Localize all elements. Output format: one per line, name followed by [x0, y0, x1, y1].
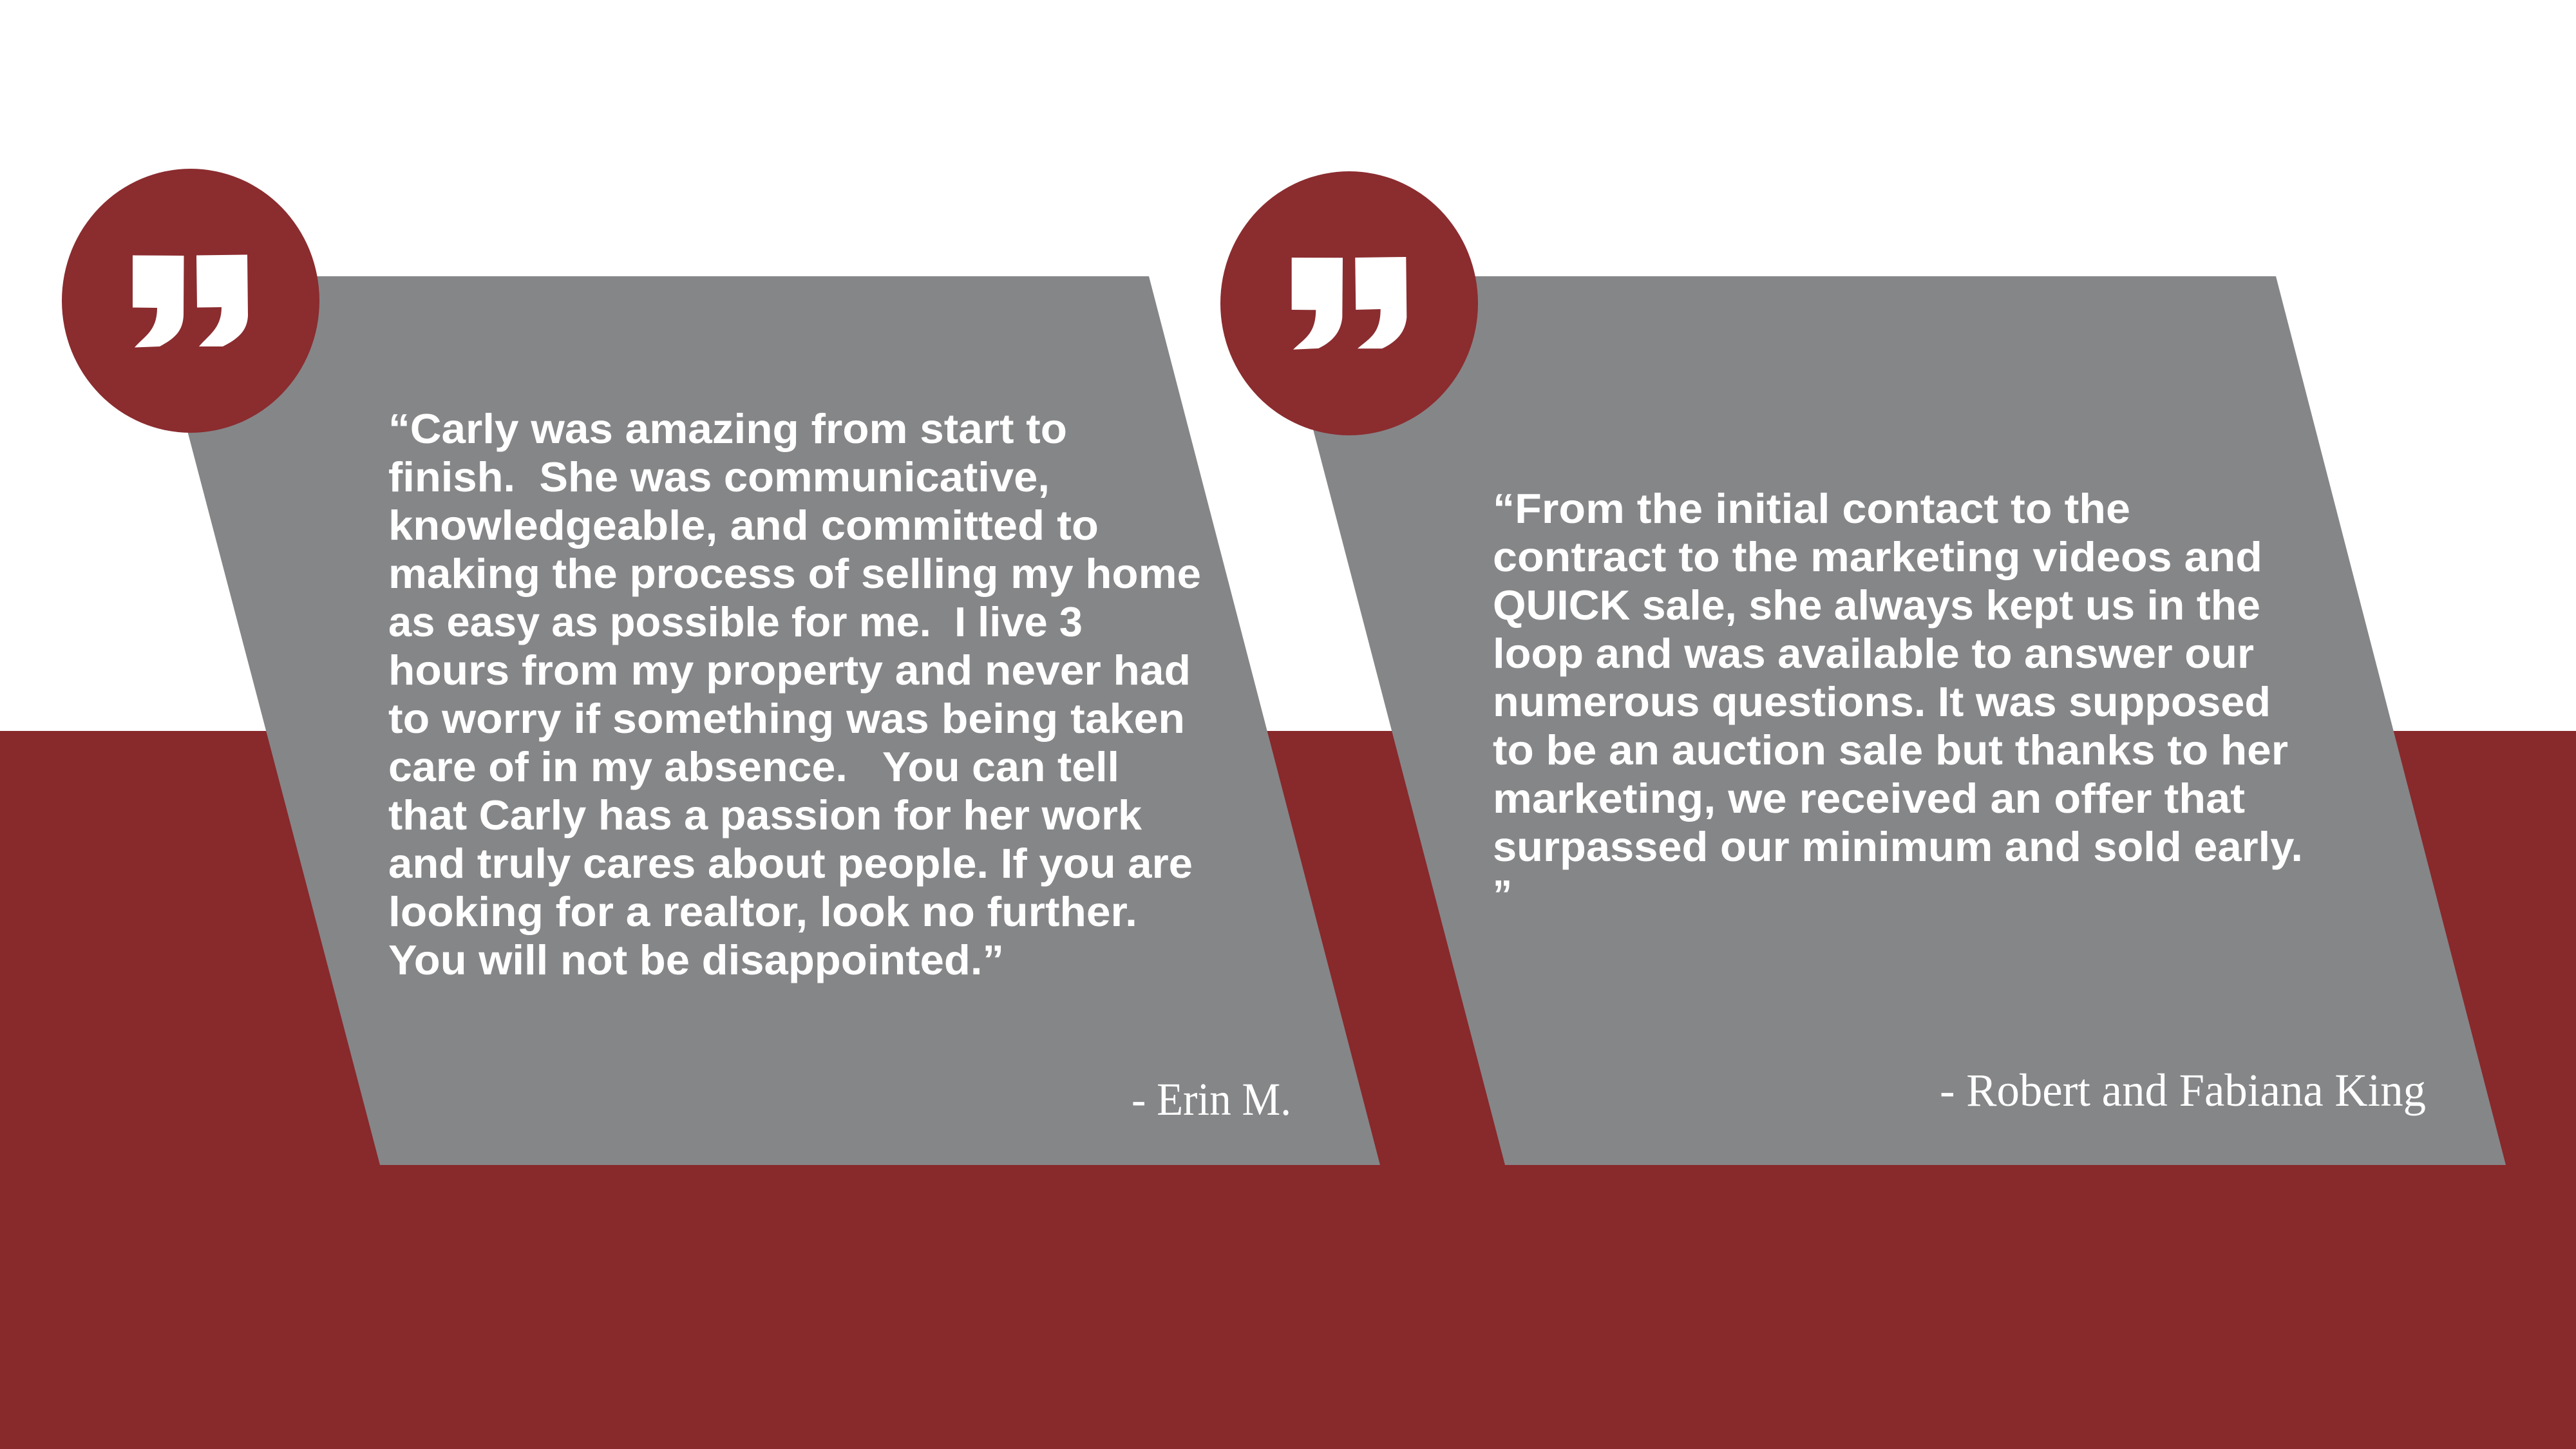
quote text: Robert and Fabiana King: [1493, 485, 2303, 918]
icon: quote badge left: [62, 169, 319, 433]
grey parallelogram card: [1273, 276, 2506, 1165]
quote text: Erin M.: care of in my absence. You can tell: [388, 743, 1119, 790]
quote text: Erin M.: “Carly was amazing from start to: [388, 405, 1067, 452]
quote text: Erin M.: to worry if something was being taken: [388, 695, 1185, 742]
quote text: Erin M.: hours from my property and never had: [388, 647, 1191, 694]
quote text: Erin M.: finish. She was communicative,: [388, 453, 1050, 500]
quote text: Robert and Fabiana King: loop and was available to answer our: [1493, 630, 2254, 677]
quote text: Robert and Fabiana King: QUICK sale, she always kept us in the: [1493, 582, 2260, 629]
quote text: Robert and Fabiana King: ”: [1493, 871, 1512, 918]
quote text: Erin M.: as easy as possible for me. I live 3: [388, 598, 1083, 645]
grey parallelogram card: [147, 276, 1380, 1165]
attribution: Erin M.: - Erin M.: [1132, 1074, 1291, 1125]
quote text: Erin M.: knowledgeable, and committed to: [388, 502, 1099, 549]
quote text: Erin M.: and truly cares about people. If you are: [388, 840, 1193, 887]
quote text: Erin M.: that Carly has a passion for her work: [388, 791, 1142, 838]
quote text: Robert and Fabiana King: “From the initial contact to the: [1493, 485, 2130, 532]
attribution: Robert and Fabiana King: - Robert and Fabiana King: [1940, 1065, 2426, 1116]
quote text: Erin M.: looking for a realtor, look no further.: [388, 888, 1137, 935]
quote text: Robert and Fabiana King: to be an auction sale but thanks to her: [1493, 726, 2288, 773]
panel: testimonial Erin M.: [147, 276, 1380, 1165]
quote text: Erin M.: making the process of selling my home: [388, 550, 1201, 597]
quote text: Erin M.: You will not be disappointed.”: [388, 936, 1004, 983]
quote text: Erin M.: [388, 405, 1201, 983]
quote text: Robert and Fabiana King: numerous questions. It was supposed: [1493, 678, 2271, 725]
quote text: Robert and Fabiana King: surpassed our minimum and sold early.: [1493, 823, 2303, 870]
quote text: Robert and Fabiana King: contract to the marketing videos and: [1493, 533, 2262, 580]
quote text: Robert and Fabiana King: marketing, we received an offer that: [1493, 775, 2245, 822]
icon: quote badge right: [1220, 171, 1478, 435]
red background band: [0, 731, 2576, 1449]
panel: testimonial Robert and Fabiana King: [1273, 276, 2506, 1165]
